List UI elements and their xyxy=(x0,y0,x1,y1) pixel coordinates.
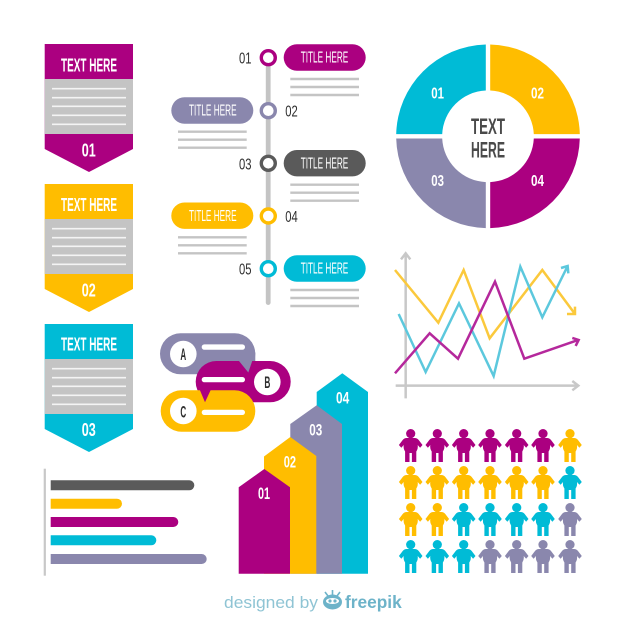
panel: banner 02: TEXT HERE xyxy=(61,194,117,215)
timeline item 02: 02 xyxy=(285,104,298,121)
timeline item 05: 05 xyxy=(239,262,252,279)
panel: banner 03: TEXT HERE xyxy=(61,334,117,355)
donut chart: 03 xyxy=(431,173,444,190)
timeline item 02: TITLE HERE xyxy=(189,103,237,120)
panel: banner 03: 03 xyxy=(82,419,96,440)
arrow 04 xyxy=(317,373,368,574)
footer: freepik credit xyxy=(224,590,402,612)
timeline item 03: 03 xyxy=(239,156,252,173)
donut centre label xyxy=(471,114,505,162)
axes xyxy=(396,253,578,398)
timeline item 04: TITLE HERE xyxy=(189,208,237,225)
panel: banner 02 xyxy=(45,184,133,312)
panel: banner 02: 02 xyxy=(82,280,96,300)
donut chart: 02 xyxy=(531,86,544,102)
arrow 03: 03 xyxy=(309,421,322,439)
arrow 02: 02 xyxy=(284,453,296,471)
timeline item 01: 01 xyxy=(239,50,252,68)
speech bubbles xyxy=(160,333,291,432)
timeline item 01: TITLE HERE xyxy=(301,50,348,67)
panel: banner 01 xyxy=(45,44,133,172)
timeline item 04: 04 xyxy=(285,209,298,226)
donut chart: 01 xyxy=(431,86,444,102)
pictogram chart: people xyxy=(399,429,582,573)
arrow 01: 01 xyxy=(258,485,270,503)
timeline item 03 xyxy=(239,150,366,201)
timeline item 05 xyxy=(239,255,366,306)
timeline item 05: TITLE HERE xyxy=(301,261,348,278)
donut centre label: TEXT xyxy=(471,114,505,139)
footer: freepik credit: designed by xyxy=(224,594,319,612)
donut chart: 04 xyxy=(531,173,544,190)
cyan series xyxy=(399,266,568,376)
bubble A: A xyxy=(180,345,186,364)
panel: banner 01: 01 xyxy=(82,140,96,161)
panel: timeline xyxy=(171,44,366,306)
bubble B: B xyxy=(264,373,270,392)
arrow 03 xyxy=(290,405,342,574)
timeline item 01 xyxy=(239,44,366,95)
bar chart xyxy=(44,469,207,576)
donut chart xyxy=(396,44,580,228)
stepped arrows chart xyxy=(239,373,368,574)
bubble C: C xyxy=(180,402,186,421)
arrow 04: 04 xyxy=(336,390,350,408)
timeline item 04 xyxy=(171,202,298,253)
icon: freepik mascot xyxy=(323,590,342,610)
timeline item 02 xyxy=(171,97,298,148)
panel: banner 01: TEXT HERE xyxy=(61,54,117,76)
bubble B tail xyxy=(199,385,211,402)
line chart xyxy=(395,253,579,398)
donut centre label: HERE xyxy=(471,137,505,162)
yellow series xyxy=(395,270,575,338)
bubble A tail xyxy=(239,352,255,372)
magenta series xyxy=(395,282,579,373)
panel: banner 03 xyxy=(45,324,133,452)
footer: freepik credit: freepik xyxy=(345,592,402,612)
timeline item 03: TITLE HERE xyxy=(301,155,348,172)
arrow 01 xyxy=(239,469,290,574)
arrow 02 xyxy=(264,437,316,574)
